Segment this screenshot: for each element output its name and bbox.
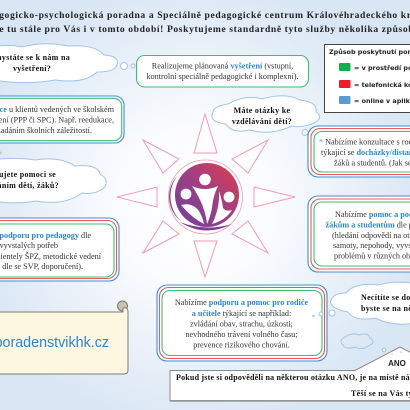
logo (168, 160, 242, 234)
cloud: empty thought (341, 334, 386, 352)
panel: vyšetření: Realizujeme plánovaná vyšetření (vstupní, (152, 62, 293, 70)
panel: podpora pro pedagogy: vyvstalých potřeb (0, 241, 58, 250)
cloud: otázky ke vzdělávání (212, 96, 320, 136)
panel: vyšetření (136, 56, 308, 87)
callout: conclusion: ANO (388, 359, 406, 368)
panel: podpora pro rodiče a učitele: nevhodného trávení volného času; (185, 330, 298, 339)
panel: podpora pro rodiče a učitele (157, 285, 327, 361)
cloud: otázky ke vzdělávání: Máte otázky ke (234, 106, 290, 115)
callout: conclusion (170, 347, 410, 401)
cloud: otázky ke vzdělávání: vzdělávání dětí? (232, 117, 292, 126)
sun rays (117, 114, 295, 277)
panel: podpora pro rodiče a učitele: prevence rizikového chování. (193, 340, 290, 350)
cloud: vyšetření question: vyšetření? (13, 64, 51, 73)
legend (324, 44, 410, 112)
panel: podpora pro pedagogy: dle se SVP, doporučení). (2, 262, 83, 271)
panel: podpora pro rodiče a učitele: Nabízíme podporu a pomoc pro rodiče (175, 298, 308, 307)
cloud: pomoc se vzděláváním (0, 152, 106, 203)
panel: podpora pro pedagogy (0, 218, 119, 281)
scroll: web address (0, 301, 128, 374)
panel: pomoc žákům a studentům (308, 196, 410, 272)
panel: konzultace u klientů (0, 96, 124, 143)
cloud: necítíte se dobře (312, 282, 410, 324)
panel: vyšetření: kontrolní speciálně pedagogické i komplexní). (146, 72, 299, 81)
title (0, 10, 410, 35)
cloud: vyšetření question (0, 44, 142, 83)
panel: docházka a distanční výuka (308, 126, 410, 177)
panel: podpora pro rodiče a učitele: zvládání obav, strachu, úzkosti; (190, 320, 293, 328)
panel: podpora pro pedagogy: podporu pro pedagogy dle (0, 231, 91, 240)
panel: podpora pro rodiče a učitele: a učitele týkající se například: (192, 309, 291, 318)
